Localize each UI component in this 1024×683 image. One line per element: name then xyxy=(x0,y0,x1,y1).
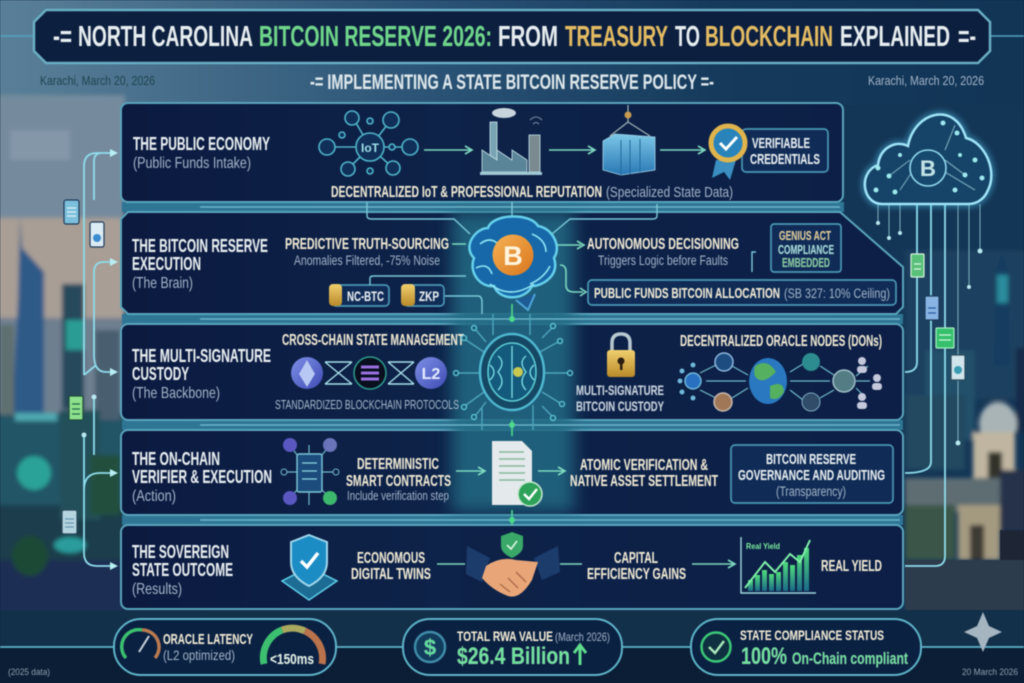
stat pill: oracle latency xyxy=(114,619,336,675)
vertical flow dots xyxy=(509,304,515,525)
icon: smart contract network xyxy=(281,438,339,505)
panel: the public economy xyxy=(121,103,843,202)
box: genius act compliance: EMBEDDED xyxy=(782,256,830,270)
heading: sovereign outcome xyxy=(132,542,233,598)
text: decentralized oracle nodes: DECENTRALIZED ORACLE NODES (DONs) xyxy=(680,333,882,350)
verifiable credentials box: CREDENTIALS xyxy=(750,151,820,168)
heading: reserve execution: THE BITCOIN RESERVE xyxy=(132,236,268,256)
line xyxy=(560,563,582,565)
on-chain verifier contents xyxy=(281,438,893,506)
icon: IoT hub xyxy=(319,111,418,176)
heading: multi-signature custody: (The Backbone) xyxy=(132,385,220,402)
text: multi-signature bitcoin custody xyxy=(576,382,664,414)
text: compliance xyxy=(740,627,908,670)
title text: NORTH CAROLINA xyxy=(78,21,253,53)
icon: up arrow xyxy=(574,645,586,665)
box: public funds allocation: (SB 327: 10% Ceiling) xyxy=(784,286,890,301)
footnote right: 20 March 2026 xyxy=(962,667,1018,677)
panel: the multi-signature custody xyxy=(121,324,903,420)
subtitle: -= IMPLEMENTING A STATE BITCOIN RESERVE POLICY =- xyxy=(310,71,714,94)
reserve execution contents xyxy=(285,202,896,314)
text: predictive truth-sourcing: PREDICTIVE TRUTH-SOURCING xyxy=(285,236,449,253)
heading: sovereign outcome: THE SOVEREIGN xyxy=(132,542,229,562)
date left: Karachi, March 20, 2026 xyxy=(40,73,155,88)
heading: multi-signature custody xyxy=(132,346,271,402)
icon: padlock xyxy=(607,334,635,377)
text: autonomous decisioning: Triggers Logic before Faults xyxy=(598,253,728,268)
text: economous digital twins: DIGITAL TWINS xyxy=(351,566,431,583)
arrow xyxy=(549,146,595,154)
title text: BITCOIN RESERVE 2026: xyxy=(259,21,492,53)
box: governance and auditing xyxy=(731,445,893,503)
text: oracle latency: ORACLE LATENCY xyxy=(163,631,253,648)
text: multi-signature bitcoin custody: MULTI-SIGNATURE xyxy=(576,382,664,398)
text: autonomous decisioning xyxy=(587,236,739,268)
left towers xyxy=(12,217,44,415)
heading: public economy: (Public Funds Intake) xyxy=(133,155,251,172)
icon: sparkle xyxy=(964,612,1002,652)
stat pill: state compliance xyxy=(691,619,921,675)
chip: ZKP xyxy=(401,284,444,306)
sovereign outcome contents xyxy=(282,532,882,600)
text: capital efficiency gains: EFFICIENCY GAINS xyxy=(587,566,686,583)
text: atomic verification: ATOMIC VERIFICATION & xyxy=(580,457,708,474)
label: real yield: REAL YIELD xyxy=(821,558,882,575)
icon: neural brain circuit xyxy=(454,314,572,430)
box: governance and auditing: GOVERNANCE AND AUDITING xyxy=(738,467,885,484)
right city xyxy=(905,250,1024,400)
arrow xyxy=(692,560,735,568)
panel: the sovereign state outcome xyxy=(121,525,903,609)
box: genius act compliance: GENIUS ACT xyxy=(779,229,831,243)
panel: the bitcoin reserve execution xyxy=(121,212,903,314)
arrow xyxy=(538,467,565,475)
stat pill: total RWA value xyxy=(403,619,622,675)
box: public funds allocation xyxy=(588,280,896,305)
text: predictive truth-sourcing: Anomalies Filtered, -75% Noise xyxy=(294,253,440,268)
title text: -= xyxy=(53,21,72,53)
text: oracle latency: (L2 optimized) xyxy=(163,648,235,663)
icon: brain with bitcoin: B xyxy=(503,241,523,271)
text: total RWA value: TOTAL RWA VALUE xyxy=(457,628,553,644)
verifiable credentials box: VERIFIABLE xyxy=(752,135,810,152)
box: governance and auditing: BITCOIN RESERVE xyxy=(766,451,856,468)
cloud with bitcoin xyxy=(865,114,991,204)
icon: IoT hub: IoT xyxy=(361,141,380,155)
icon: credential badge xyxy=(711,126,745,180)
chart: real yield: Real Yield xyxy=(746,541,780,551)
box: public funds allocation: PUBLIC FUNDS BITCOIN ALLOCATION xyxy=(594,285,780,302)
text: autonomous decisioning: AUTONOMOUS DECISIONING xyxy=(587,236,739,253)
heading: reserve execution xyxy=(132,236,268,292)
heading: on-chain verifier: VERIFIER & EXECUTION xyxy=(132,467,272,487)
verifiable credentials box xyxy=(742,129,828,172)
text: deterministic smart contracts: SMART CONTRACTS xyxy=(346,473,451,490)
heading: sovereign outcome: STATE OUTCOME xyxy=(132,560,233,580)
chart: real yield xyxy=(741,537,816,593)
title text: BLOCKCHAIN xyxy=(705,21,833,53)
cloud with bitcoin: B xyxy=(920,156,936,181)
icon: brain with bitcoin xyxy=(469,216,557,310)
text: deterministic smart contracts: Include verification step xyxy=(347,489,449,503)
icon: verified document xyxy=(492,441,542,506)
icon: dollar xyxy=(415,632,445,662)
gap bands between panels xyxy=(122,202,903,525)
text: multi-signature bitcoin custody: BITCOIN CUSTODY xyxy=(576,398,664,414)
caption: decentralized IoT: (Specialized State Data) xyxy=(606,185,733,201)
box: governance and auditing: (Transparency) xyxy=(776,484,846,499)
footnote left: (2025 data) xyxy=(8,667,50,677)
heading: multi-signature custody: CUSTODY xyxy=(132,364,189,384)
title text: TO xyxy=(675,21,700,53)
arrow xyxy=(424,146,472,154)
text: economous digital twins xyxy=(351,550,431,583)
heading: reserve execution: EXECUTION xyxy=(132,254,201,274)
heading: public economy xyxy=(133,134,270,172)
icon: handshake xyxy=(466,532,560,597)
text: capital efficiency gains: CAPITAL xyxy=(614,550,658,567)
value: latency: <150ms xyxy=(270,651,314,668)
title text: FROM xyxy=(498,21,558,53)
icon: factory xyxy=(480,108,542,175)
box: genius act compliance xyxy=(771,224,841,272)
heading: on-chain verifier: (Action) xyxy=(132,488,176,505)
title text: EXPLAINED xyxy=(840,21,950,53)
icon: oracle network and globe xyxy=(678,353,882,411)
text: atomic verification: NATIVE ASSET SETTLEMENT xyxy=(570,473,718,490)
heading: public economy: THE PUBLIC ECONOMY xyxy=(133,134,270,154)
arrow xyxy=(660,146,705,154)
text: compliance: STATE COMPLIANCE STATUS xyxy=(740,627,884,643)
caption: standardized protocols: STANDARDIZED BLOCKCHAIN PROTOCOLS xyxy=(275,397,459,412)
heading: multi-signature custody: THE MULTI-SIGNATURE xyxy=(132,346,271,366)
icon: compliance check xyxy=(702,632,730,662)
date right: Karachi, March 20, 2026 xyxy=(868,73,984,88)
heading: sovereign outcome: (Results) xyxy=(132,581,182,598)
text: economous digital twins: ECONOMOUS xyxy=(357,550,425,567)
arrow xyxy=(456,467,485,475)
heading: on-chain verifier: THE ON-CHAIN xyxy=(132,449,220,469)
icon: shipping container xyxy=(603,105,655,175)
panel: the on-chain verifier and execution xyxy=(121,430,903,515)
text: compliance: 100% xyxy=(741,643,787,670)
icon: chains ETH SOL L2 xyxy=(291,357,447,389)
icons: floating documents xyxy=(62,200,965,534)
text: oracle latency xyxy=(163,631,253,663)
text: cross-chain state management: CROSS-CHAIN STATE MANAGEMENT xyxy=(282,332,464,349)
text: total RWA value: $26.4 Billion xyxy=(457,643,570,670)
caption: decentralized IoT: DECENTRALIZED IoT & PROFESSIONAL REPUTATION xyxy=(331,184,602,201)
band highlight lines xyxy=(200,207,900,520)
heading: on-chain verifier xyxy=(132,449,272,505)
heading: reserve execution: (The Brain) xyxy=(132,275,193,292)
text: capital efficiency gains xyxy=(587,550,686,583)
icon: dollar: $ xyxy=(424,635,436,660)
multi-signature contents xyxy=(275,314,882,430)
chip: ZKP: ZKP xyxy=(419,289,439,304)
chip: NC-BTC xyxy=(329,284,389,306)
text: predictive truth-sourcing xyxy=(285,236,449,268)
text: total RWA value xyxy=(457,628,610,670)
icon: small gauge xyxy=(122,630,159,658)
line xyxy=(437,563,465,565)
connectors xyxy=(367,202,756,314)
box: genius act compliance: COMPLIANCE xyxy=(778,243,834,257)
text: compliance: On-Chain compliant xyxy=(792,649,908,668)
text: total RWA value: (March 2026) xyxy=(555,630,610,644)
central teal glow column xyxy=(452,212,574,512)
title text: TREASURY xyxy=(565,21,668,53)
icon: chains ETH SOL L2: L2 xyxy=(422,366,440,383)
title text: =- xyxy=(958,21,976,53)
icon: latency gauge xyxy=(263,628,323,664)
text: atomic verification xyxy=(570,457,718,490)
chip: NC-BTC: NC-BTC xyxy=(347,289,384,304)
left sky xyxy=(0,95,125,220)
icon: shield on hex base xyxy=(282,535,337,600)
title banner xyxy=(34,10,990,63)
text: deterministic smart contracts: DETERMINISTIC xyxy=(357,456,439,473)
text: deterministic smart contracts xyxy=(346,456,451,503)
title text xyxy=(53,21,976,53)
